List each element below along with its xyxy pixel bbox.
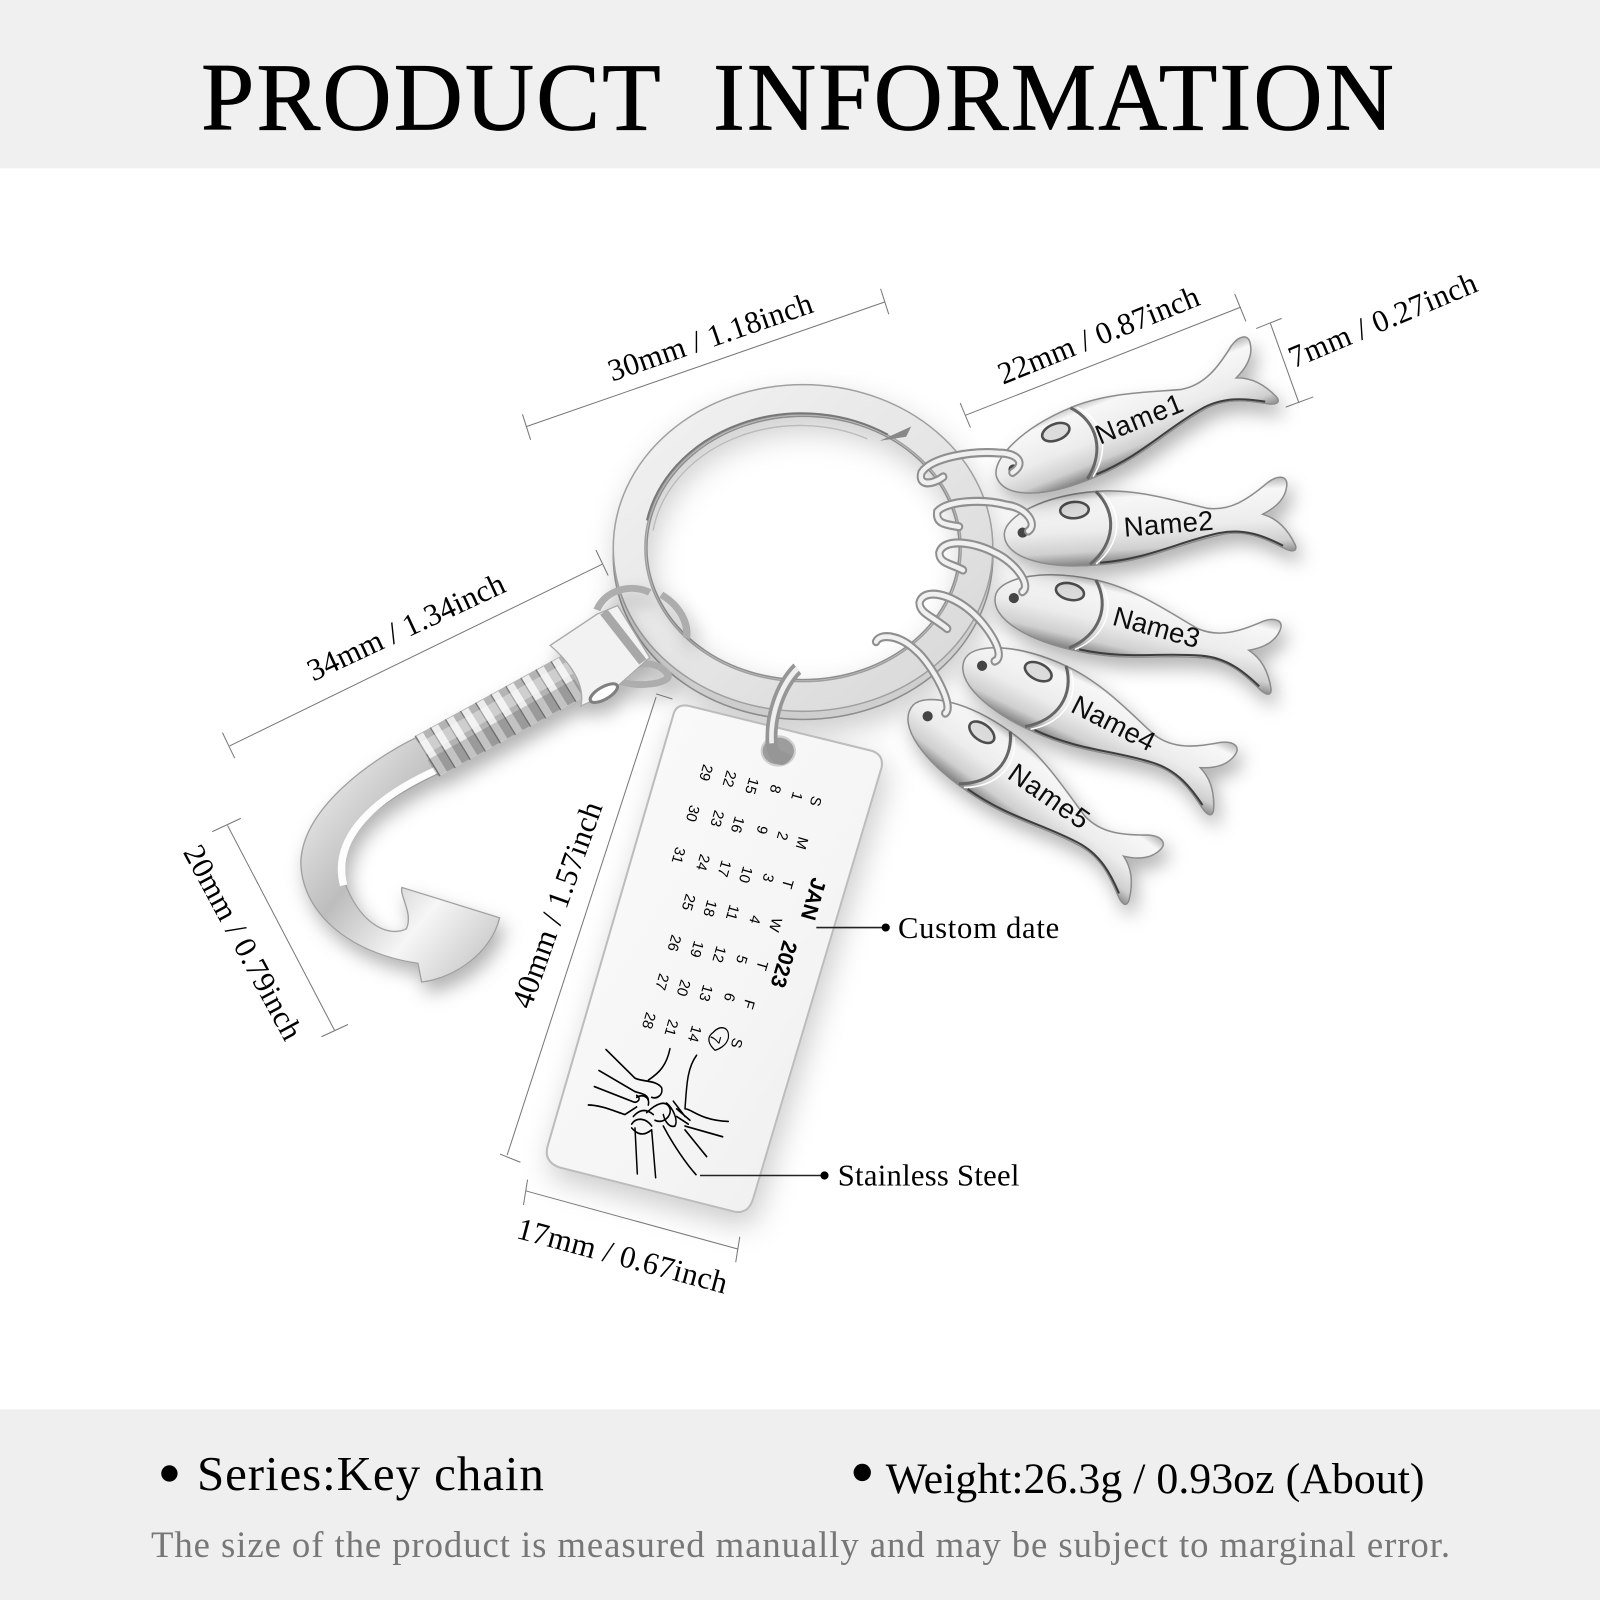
dimension: keyring width: 30mm / 1.18inch	[603, 285, 818, 388]
hands drawing and heart	[588, 1028, 728, 1178]
fish jump rings	[876, 453, 1032, 713]
dimension: tag length	[500, 694, 672, 1162]
callout: stainless steel: Stainless Steel	[838, 1159, 1019, 1193]
name label: Name5	[1003, 757, 1096, 835]
dimension: hook length	[222, 550, 608, 758]
calendar: 17	[714, 858, 733, 878]
fish charm 1	[982, 333, 1280, 511]
calendar: 6	[720, 991, 737, 1003]
calendar: 5	[732, 953, 750, 965]
calendar: 20	[673, 978, 693, 998]
calendar: 23	[706, 808, 726, 828]
calendar: 3	[759, 871, 776, 884]
dimension: hook width: 20mm / 0.79inch	[176, 839, 310, 1046]
hook eye block	[550, 606, 650, 706]
name label: Name4	[1067, 689, 1161, 757]
calendar: 22	[719, 768, 739, 789]
dimension: keyring width	[522, 285, 889, 440]
calendar: 13	[695, 983, 715, 1003]
calendar: 21	[660, 1017, 680, 1038]
fish charm 5	[891, 673, 1170, 908]
calendar: 2023	[766, 938, 802, 991]
name label: Name2	[1123, 505, 1214, 543]
name label: Name1	[1091, 387, 1187, 450]
calendar: 16	[727, 814, 747, 835]
calendar: S	[727, 1036, 745, 1050]
dimension: fish width: 7mm / 0.27inch	[1283, 265, 1482, 375]
weight spec: Weight:26.3g / 0.93oz (About)	[886, 1455, 1424, 1503]
calendar: W	[765, 916, 784, 933]
calendar: JAN	[796, 875, 831, 923]
fish charm 2	[1002, 477, 1296, 571]
calendar: 7	[705, 1033, 723, 1045]
calendar: 19	[686, 939, 706, 959]
ferrule coil	[423, 668, 580, 768]
small link rings	[597, 588, 687, 685]
calendar: 1	[787, 790, 805, 802]
calendar: S	[806, 794, 824, 808]
calendar: 27	[651, 972, 671, 992]
footer band	[0, 1409, 1600, 1600]
callout: stainless steel	[700, 1159, 1019, 1193]
callout: custom date	[816, 911, 1059, 945]
calendar: 28	[638, 1010, 658, 1031]
calendar: 8	[766, 783, 783, 795]
calendar: 2	[773, 830, 790, 842]
dimension: tag width: 17mm / 0.67inch	[513, 1211, 732, 1301]
disclaimer: The size of the product is measured manually and may be subject to marginal error.	[151, 1524, 1450, 1565]
calendar	[638, 762, 831, 1050]
name label: Name3	[1110, 600, 1203, 654]
dimension: fish length	[960, 278, 1246, 428]
dimension: fish width	[1256, 265, 1482, 407]
hook	[301, 588, 687, 982]
tag hole and jump ring	[762, 669, 797, 766]
fish charm 3	[987, 555, 1287, 697]
calendar: 11	[722, 903, 741, 922]
fish charm 4	[949, 622, 1244, 818]
calendar: 29	[695, 762, 715, 783]
series spec: Series:Key chain	[197, 1446, 544, 1501]
calendar: M	[792, 835, 810, 851]
stainless steel tag	[547, 669, 882, 1212]
calendar: 15	[741, 776, 761, 796]
calendar: 26	[664, 933, 683, 953]
calendar: 12	[708, 944, 728, 964]
calendar: 18	[699, 898, 719, 918]
dimension: tag length: 40mm / 1.57inch	[504, 797, 610, 1013]
calendar: 25	[678, 892, 698, 912]
calendar: 14	[684, 1024, 704, 1044]
calendar: T	[778, 877, 796, 890]
calendar: 4	[745, 913, 763, 926]
header band	[0, 0, 1600, 168]
calendar: T	[752, 959, 770, 972]
hook body	[301, 738, 500, 982]
calendar: 10	[735, 864, 755, 885]
dimension: hook length: 34mm / 1.34inch	[301, 566, 511, 688]
calendar: 9	[752, 823, 770, 836]
calendar: 30	[682, 803, 702, 823]
calendar: 24	[692, 852, 712, 872]
calendar: 31	[668, 845, 688, 865]
title: PRODUCT INFORMATION	[201, 45, 1394, 151]
dimension: fish length: 22mm / 0.87inch	[993, 278, 1205, 391]
key ring	[613, 385, 993, 719]
callout: custom date: Custom date	[898, 911, 1059, 945]
calendar: F	[739, 998, 757, 1011]
